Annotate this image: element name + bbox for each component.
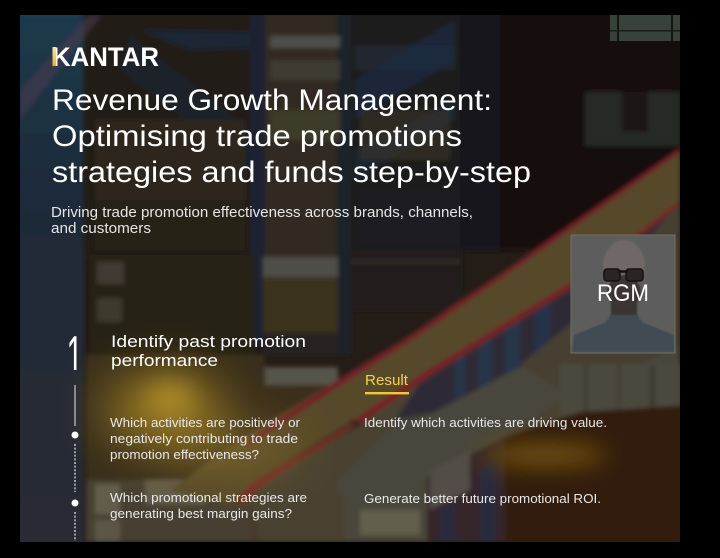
- step number 1: 1: [67, 323, 83, 389]
- result heading: Result: [365, 373, 408, 389]
- result 1: Identify which activities are driving value.: [364, 415, 607, 430]
- window blocks upper right: [610, 15, 680, 41]
- subtitle: and customers: [51, 221, 151, 237]
- title: Optimising trade promotions: [52, 120, 462, 153]
- left column: [16, 10, 84, 550]
- windows panel upper right: [585, 92, 680, 146]
- right tan block: [521, 206, 680, 385]
- icon: portrait of man with glasses: [572, 240, 674, 352]
- right side below the red band: [258, 384, 573, 508]
- step heading: Identify past promotion: [111, 332, 306, 351]
- bottom right: [505, 405, 690, 550]
- step heading: performance: [111, 351, 218, 370]
- question 1: negatively contributing to trade: [110, 431, 298, 446]
- RGM portrait card: [571, 235, 675, 353]
- title: strategies and funds step-by-step: [52, 156, 531, 189]
- question 2: Which promotional strategies are: [110, 490, 307, 505]
- step heading: [111, 332, 306, 370]
- middle: [90, 255, 255, 355]
- red lines: [240, 148, 680, 446]
- title: [52, 84, 531, 189]
- question 2: [110, 490, 307, 521]
- RGM portrait card: RGM: [597, 280, 649, 307]
- question 1: Which activities are positively or: [110, 415, 301, 430]
- dark window band: [396, 219, 664, 420]
- title: Revenue Growth Management:: [52, 84, 492, 117]
- subtitle: [51, 205, 473, 237]
- lower windows: [347, 480, 426, 540]
- result 2: Generate better future promotional ROI.: [364, 491, 601, 506]
- logo: KANTAR: KANTAR: [52, 42, 159, 72]
- step timeline: [72, 385, 78, 541]
- upper building: [250, 16, 251, 17]
- result heading: [365, 373, 409, 394]
- question 1: [110, 415, 301, 462]
- tan band: [170, 150, 680, 505]
- question 1: promotion effectiveness?: [110, 447, 259, 462]
- question 2: generating best margin gains?: [110, 506, 292, 521]
- lower tan band: [339, 348, 680, 498]
- glows: [103, 372, 300, 472]
- lower left: [85, 355, 265, 485]
- subtitle: Driving trade promotion effectiveness across brands, channels,: [51, 205, 473, 221]
